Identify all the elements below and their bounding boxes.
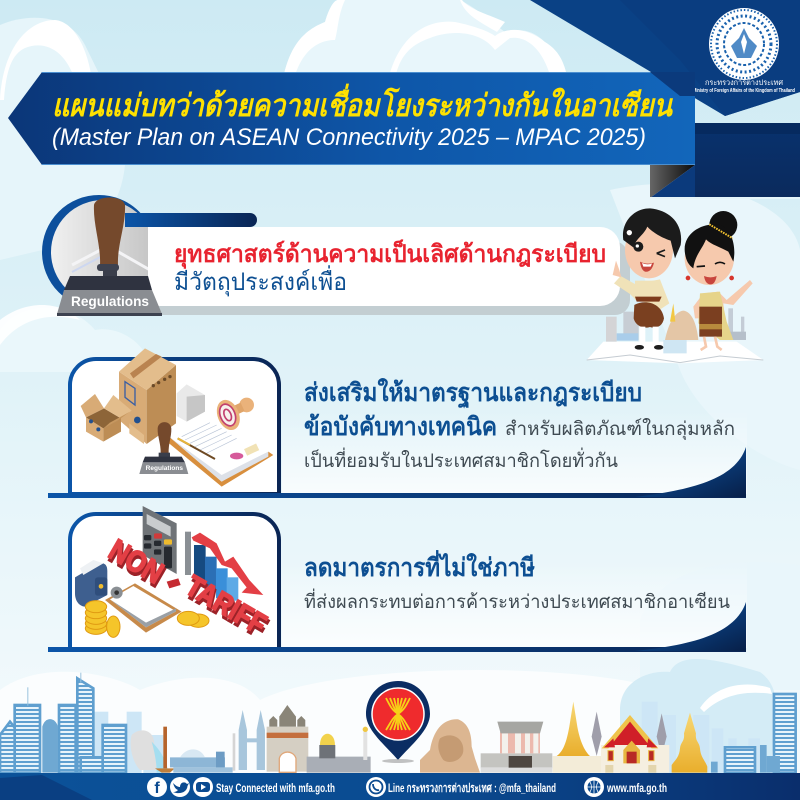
- skyline right: [420, 694, 796, 773]
- mascots on map: [587, 208, 763, 363]
- title: Thai: แผนแม่บทว่าด้วยความเชื่อมโยงระหว่างกันในอาเซียน: [52, 83, 674, 123]
- pill shadow: [150, 240, 630, 315]
- card 1 base line and swoosh: [48, 447, 746, 498]
- footer text: website: www.mfa.go.th: [606, 781, 667, 795]
- card 2 body: ที่ส่งผลกระทบต่อการค้าระหว่างประเทศสมาชิกอาเซียน: [304, 588, 730, 613]
- woman mascot: [685, 211, 753, 350]
- title ribbon right band and fold: [650, 123, 800, 199]
- card 2 illustration: [75, 506, 273, 645]
- footer bar: [0, 773, 800, 800]
- heading line red: ยุทธศาสตร์ด้านความเป็นเลิศด้านกฎระเบียบ: [174, 239, 606, 270]
- navy bar above pill: [125, 213, 257, 227]
- card 2 text backdrop: [282, 560, 747, 648]
- card 2 base line and swoosh: [48, 602, 746, 652]
- NON-TARIFF lettering: NON: [103, 533, 169, 590]
- heading line blue: มีวัตถุประสงค์เพื่อ: [174, 265, 347, 297]
- icon: line: [366, 777, 386, 797]
- NON-TARIFF lettering: TARIFF: [180, 569, 272, 641]
- logo: ministry seal: [709, 8, 779, 80]
- NON-TARIFF lettering: TARIFF: [180, 572, 273, 645]
- title ribbon: [8, 72, 695, 165]
- logo caption: [693, 78, 795, 94]
- card 1 body: สำหรับผลิตภัณฑ์ในกลุ่มหลัก: [505, 418, 735, 441]
- card 2 heading: ลดมาตรการที่ไม่ใช่ภาษี: [304, 550, 535, 582]
- strategy heading panel: [47, 198, 630, 316]
- NON-TARIFF lettering: [103, 533, 273, 645]
- card 1: [48, 348, 747, 498]
- subtitle: English: (Master Plan on ASEAN Connectivity 2025 – MPAC 2025): [52, 124, 646, 151]
- man mascot: [613, 208, 681, 350]
- card 1 heading line 2: ข้อบังคับทางเทคนิค: [304, 413, 497, 441]
- card 2: [48, 506, 747, 652]
- card 1 heading: ส่งเสริมให้มาตรฐานและกฎระเบียบ: [304, 377, 642, 409]
- card 2 arch frame: [70, 514, 279, 649]
- stamp icon: Regulations: [71, 293, 149, 309]
- card 1 illustration: [81, 348, 273, 487]
- top-right logo banner: [530, 0, 800, 116]
- NON-TARIFF lettering: NON: [104, 537, 169, 594]
- card 1 text backdrop: [282, 410, 747, 494]
- ASEAN map pin: [366, 681, 430, 763]
- icon: twitter: [170, 777, 190, 797]
- ring behind stamp: [47, 200, 155, 304]
- footer text: line account: Line กระทรวงการต่างประเทศ : @mfa_thailand: [388, 781, 556, 795]
- icon: facebook: f: [154, 780, 160, 797]
- stamp icon: [57, 198, 162, 316]
- ASEAN rice-stalk emblem: [386, 698, 410, 730]
- icon: facebook: [147, 777, 167, 797]
- icon: globe: [584, 777, 604, 797]
- card 1 body line 2: เป็นที่ยอมรับในประเทศสมาชิกโดยทั่วกัน: [304, 447, 618, 472]
- map and landmarks: [587, 303, 763, 363]
- card 1 arch frame: [70, 359, 279, 494]
- skyline left: [0, 673, 371, 773]
- footer text: stay connected: Stay Connected with mfa.go.th: [216, 781, 335, 795]
- logo caption: กระทรวงการต่างประเทศ: [705, 78, 783, 87]
- white pill: [148, 227, 620, 306]
- card 1 illustration: Regulations: [146, 465, 183, 472]
- icon: youtube: [193, 777, 213, 797]
